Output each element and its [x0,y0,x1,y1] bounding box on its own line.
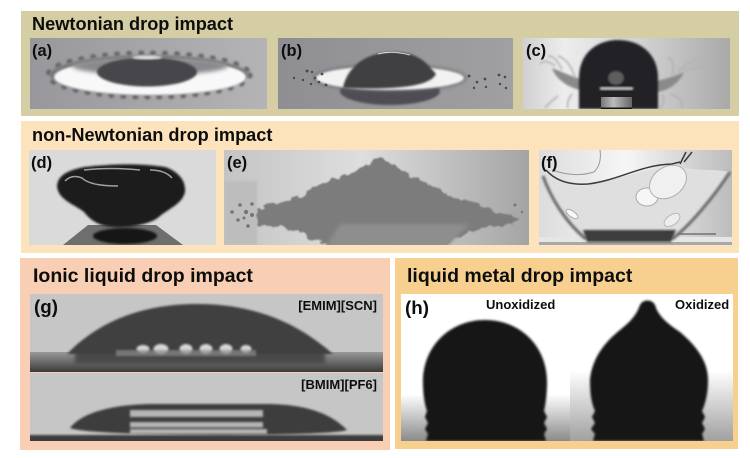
label (d): (d) [31,154,52,172]
image (h): unoxidized and oxidized liquid metal drops [401,294,733,441]
label [BMIM][PF6]: [BMIM][PF6] [301,377,377,392]
image (d): dark viscous drop [29,150,216,245]
label (c): (c) [526,42,546,60]
image (g) bottom: [BMIM][PF6] drop [30,373,383,441]
label (h): (h) [405,297,429,318]
image (e): granular pile drop [224,150,529,245]
heading: liquid metal drop impact: liquid metal drop impact [407,265,633,287]
label (b): (b) [281,42,302,60]
heading: Ionic liquid drop impact: Ionic liquid drop impact [33,265,253,287]
label (g): (g) [34,296,58,317]
image (g) top: [EMIM][SCN] drop [30,294,383,372]
image (b): drop with splashing droplets [278,38,513,109]
panel: Ionic liquid drop impact [20,258,393,450]
panel: non-Newtonian drop impact [21,121,739,253]
image (a): drop spreading with crown of droplets [30,38,267,109]
label Unoxidized: Unoxidized [486,297,555,312]
label [EMIM][SCN]: [EMIM][SCN] [298,298,377,313]
heading: non-Newtonian drop impact: non-Newtonian drop impact [32,125,272,145]
image (c): dome drop with crown [523,38,730,109]
label Oxidized: Oxidized [675,297,729,312]
label (a): (a) [32,42,52,60]
heading: Newtonian drop impact: Newtonian drop impact [32,14,233,34]
label (e): (e) [227,154,247,172]
image (f): thin polymer sheet bowl [539,150,732,245]
label (f): (f) [541,154,557,172]
panel: liquid metal drop impact [395,258,738,449]
panel: Newtonian drop impact [21,11,739,116]
